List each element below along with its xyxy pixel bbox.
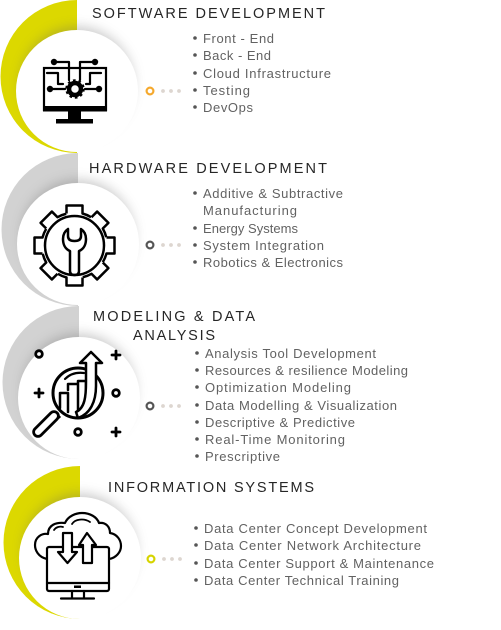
icon circle <box>17 183 139 305</box>
list: Real-Time Monitoring <box>205 432 345 447</box>
list: Manufacturing <box>203 203 297 218</box>
icon circle <box>18 337 140 459</box>
list: Analysis Tool Development <box>205 346 376 361</box>
list: Resources & resilience Modeling <box>205 363 408 378</box>
list <box>195 346 408 464</box>
list: Front - End <box>203 31 274 46</box>
list: Energy Systems <box>203 221 298 236</box>
panel: hardware development <box>2 153 344 306</box>
panel: modeling and data analysis <box>3 306 408 464</box>
icon: magnifier with rising chart <box>35 351 120 436</box>
heading: MODELING & DATA <box>93 309 255 325</box>
panel: software development <box>1 0 331 153</box>
list <box>194 521 434 588</box>
list <box>193 31 331 115</box>
heading: HARDWARE DEVELOPMENT <box>89 161 327 177</box>
connector dots <box>147 88 181 94</box>
heading: SOFTWARE DEVELOPMENT <box>92 6 325 22</box>
crescent: grey <box>3 306 79 459</box>
list: Robotics & Electronics <box>203 255 344 270</box>
icon: monitor with circuit gear <box>43 59 107 123</box>
list: Testing <box>203 83 250 98</box>
list: DevOps <box>203 100 254 115</box>
icon circle <box>16 30 138 152</box>
list: Back - End <box>203 48 271 63</box>
heading: ANALYSIS <box>133 328 215 344</box>
panel: information systems <box>4 466 434 619</box>
crescent: grey <box>2 153 78 306</box>
icon: cloud with data transfer and monitor <box>35 513 121 598</box>
list: Data Center Technical Training <box>204 573 399 588</box>
heading <box>93 309 255 344</box>
icon: gear with wrench <box>34 205 115 286</box>
list <box>193 186 344 270</box>
list: Cloud Infrastructure <box>203 66 331 81</box>
icon circle <box>19 497 141 619</box>
heading: INFORMATION SYSTEMS <box>108 480 314 496</box>
list: Data Center Concept Development <box>204 521 427 536</box>
list: Data Center Network Architecture <box>204 538 421 553</box>
connector dots <box>148 556 182 562</box>
connector dots <box>147 403 181 409</box>
crescent: yellow <box>1 0 77 153</box>
list: System Integration <box>203 238 324 253</box>
connector dots <box>147 242 181 248</box>
list: Data Center Support & Maintenance <box>204 556 434 571</box>
list: Data Modelling & Visualization <box>205 398 397 413</box>
list: Descriptive & Predictive <box>205 415 355 430</box>
list: Additive & Subtractive <box>203 186 343 201</box>
crescent: yellow <box>4 466 80 619</box>
list: Optimization Modeling <box>205 380 351 395</box>
list: Prescriptive <box>205 449 280 464</box>
